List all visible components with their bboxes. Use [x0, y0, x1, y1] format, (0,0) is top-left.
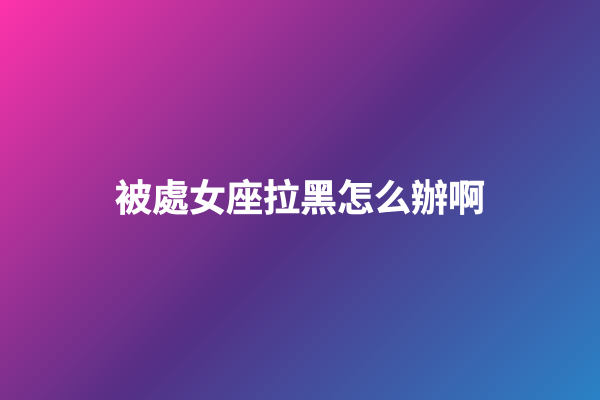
title: 被處女座拉黑怎么辦啊 — [115, 178, 485, 219]
